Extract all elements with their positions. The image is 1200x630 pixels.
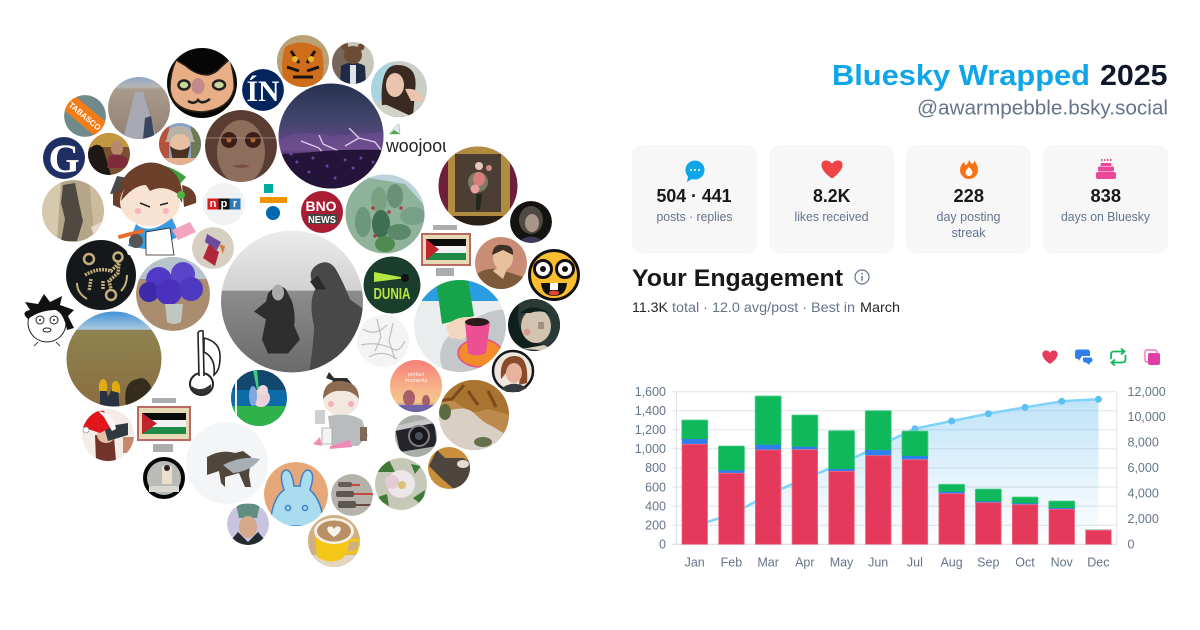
- avatar: anime man: [475, 237, 527, 289]
- title: Bluesky Wrapped: [832, 60, 1090, 92]
- avatar: feet on steppe field: [66, 311, 162, 415]
- stat label: likes received: [794, 210, 869, 224]
- avatar: nerd emoji: [530, 250, 578, 300]
- avatar: yellow latte cup: [308, 515, 360, 567]
- avatar: bear suit person: [332, 42, 374, 84]
- avatar: Tabasco: TABASCO: [67, 100, 102, 132]
- avatar: anime girl with apron: [110, 162, 198, 255]
- x axis months: Oct: [1015, 556, 1035, 570]
- stacked bars: reposts: [682, 396, 1111, 530]
- avatar: white camellia: [375, 458, 427, 510]
- icon: heart: [821, 160, 843, 178]
- y axis left: 1,000: [635, 442, 666, 456]
- avatar: black embroidery: [66, 240, 136, 310]
- panel: avatar cluster: [24, 35, 578, 567]
- y axis right: 12,000: [1128, 385, 1166, 399]
- panel: posts and replies stat: [632, 145, 757, 253]
- stat label: days on Bluesky: [1061, 210, 1151, 224]
- stat value: 8.2K: [813, 186, 850, 206]
- y axis right: 0: [1128, 538, 1134, 552]
- avatar: NPR logo: p: [221, 198, 228, 210]
- stat value: 228: [954, 186, 984, 206]
- avatar: teal orange blue divide sign: [260, 184, 287, 220]
- icon: chat bubble: [685, 160, 705, 182]
- x axis months: Sep: [977, 556, 999, 570]
- chart: monthly engagement stacked bars with cumulative line: [635, 385, 1166, 570]
- icon: replies chat: [1075, 350, 1092, 365]
- avatar: bearded man toy: [159, 123, 201, 165]
- y axis left: 1,600: [635, 385, 666, 399]
- avatar: blue bunny: [264, 462, 328, 526]
- panel: streak stat: [906, 145, 1031, 253]
- x axis months: Nov: [1051, 556, 1074, 570]
- avatar: stone sculpture: [42, 180, 104, 242]
- avatar: NPR logo: n: [210, 198, 217, 210]
- avatar: NPR logo: [203, 183, 245, 225]
- icon: likes heart: [1042, 350, 1058, 364]
- engagement summary: [632, 299, 900, 315]
- avatar: Tabasco: [62, 95, 108, 137]
- avatar: girl with camel: [220, 230, 364, 374]
- avatar: prickly pear cactus: [345, 174, 426, 254]
- y axis left: 0: [659, 538, 666, 552]
- avatar: tabby on orange: [428, 447, 471, 490]
- x axis months: Jul: [907, 556, 923, 570]
- avatar: palestinian flag banner: [421, 225, 471, 276]
- stat value: 504 · 441: [656, 186, 732, 206]
- avatar: perfect moments sunset: moments: [405, 378, 428, 384]
- y axis right: 6,000: [1128, 461, 1159, 475]
- avatar: cat with fish: [186, 422, 268, 504]
- y axis right: [1128, 385, 1166, 552]
- x axis months: Jun: [868, 556, 888, 570]
- engagement summary: March: [860, 299, 900, 315]
- x axis months: Mar: [757, 556, 779, 570]
- avatar: perfect moments sunset: perfect: [408, 372, 425, 378]
- avatar: perfect moments sunset: [390, 360, 442, 413]
- cumulative line: [695, 399, 1098, 526]
- chart legend: [1042, 348, 1160, 366]
- y axis left: 600: [645, 480, 666, 494]
- icon: cake: [1096, 159, 1116, 179]
- x axis months: Dec: [1087, 556, 1110, 570]
- avatar: music note sketch: [190, 331, 220, 395]
- avatar: wrenches: [331, 474, 373, 516]
- stat label: [936, 210, 1001, 240]
- y axis left: [635, 385, 666, 552]
- x axis months: Feb: [721, 556, 742, 570]
- avatar: man at cafe: [88, 133, 130, 175]
- y axis right: 4,000: [1128, 486, 1159, 500]
- avatar: coffee cup illustration: [414, 280, 506, 372]
- title: 2025: [1100, 60, 1168, 92]
- x axis months: May: [830, 556, 854, 570]
- cumulative area: [695, 399, 1098, 544]
- avatar: vintage camera: [395, 415, 437, 457]
- avatar: desert road: [108, 77, 170, 139]
- avatar: black cat: [166, 47, 238, 119]
- cumulative points: [911, 396, 1102, 432]
- avatar: BNO News: [301, 191, 343, 233]
- avatar: line sketch: [357, 315, 409, 367]
- avatar: cartoon face sketch: [24, 294, 74, 346]
- stat value: 838: [1090, 186, 1121, 206]
- y axis right: 10,000: [1128, 410, 1166, 424]
- avatar: santa hat VR: [82, 409, 134, 461]
- avatar: woman with long hair: [371, 61, 427, 117]
- avatar: IN logo: ÍN: [246, 75, 280, 108]
- icon: quotes copy: [1145, 350, 1160, 365]
- icon: flame: [960, 159, 978, 179]
- handle: @awarmpebble.bsky.social: [917, 98, 1168, 120]
- y axis left: 1,400: [635, 404, 666, 418]
- avatar: Dunia logo: DUNIA: [374, 286, 411, 303]
- avatar: IN logo: [242, 69, 284, 111]
- avatar: NPR logo: r: [233, 198, 238, 210]
- panel: days on Bluesky stat: [1043, 145, 1168, 253]
- avatar: purple flowers: [136, 257, 210, 331]
- avatar: old painting woman: [508, 299, 560, 351]
- avatar: tiger: [277, 35, 329, 87]
- stacked bars: likes: [682, 444, 1111, 544]
- avatar: ginger cat close-up: [438, 379, 510, 451]
- x axis months: Jan: [685, 556, 705, 570]
- engagement summary: total · 12.0 avg/post · Best in: [672, 299, 855, 315]
- y axis left: 800: [645, 461, 666, 475]
- avatar: BNO News: BNO: [306, 198, 337, 214]
- avatar: portrait in black ring: [145, 459, 183, 497]
- avatar: green pig: [231, 370, 287, 428]
- icon: reposts arrows: [1111, 348, 1126, 366]
- avatar: BNO News: NEWS: [308, 214, 336, 226]
- y axis left: 400: [645, 500, 666, 514]
- icon: info: [855, 270, 869, 284]
- avatar: palestinian flag banner 2: [137, 398, 191, 452]
- avatar: woojoou broken image: woojoou: [385, 135, 452, 156]
- avatar: woven fabric: [192, 227, 234, 269]
- heading: your engagement: Your Engagement: [632, 265, 843, 292]
- y axis left: 1,200: [635, 423, 666, 437]
- y axis left: 200: [645, 518, 666, 532]
- avatar: Guardian G: G: [48, 136, 80, 181]
- avatar: dark hair portrait: [510, 201, 552, 243]
- engagement summary: 11.3K: [632, 299, 669, 315]
- avatar: lightning storm: [278, 83, 384, 189]
- stat label: posts · replies: [656, 210, 732, 224]
- stacked bars: replies: [682, 439, 1075, 510]
- avatar: red hair black ring: [493, 351, 533, 392]
- x axis months: Apr: [795, 556, 815, 570]
- y axis right: 8,000: [1128, 436, 1159, 450]
- y axis right: 2,000: [1128, 512, 1159, 526]
- x axis months: Aug: [940, 556, 963, 570]
- avatar: chibi sketch with cat: [313, 372, 368, 449]
- avatar: warrior: [227, 503, 269, 545]
- x axis months: [685, 556, 1110, 570]
- avatar: woojoou broken image: [385, 124, 452, 156]
- panel: likes stat: [769, 145, 894, 253]
- stat label: streak: [952, 226, 986, 240]
- avatar: Dunia logo: [364, 256, 420, 314]
- avatar: flower painting: [438, 146, 518, 226]
- stat label: day posting: [936, 210, 1001, 224]
- avatar: woman in round sunglasses: [205, 110, 277, 184]
